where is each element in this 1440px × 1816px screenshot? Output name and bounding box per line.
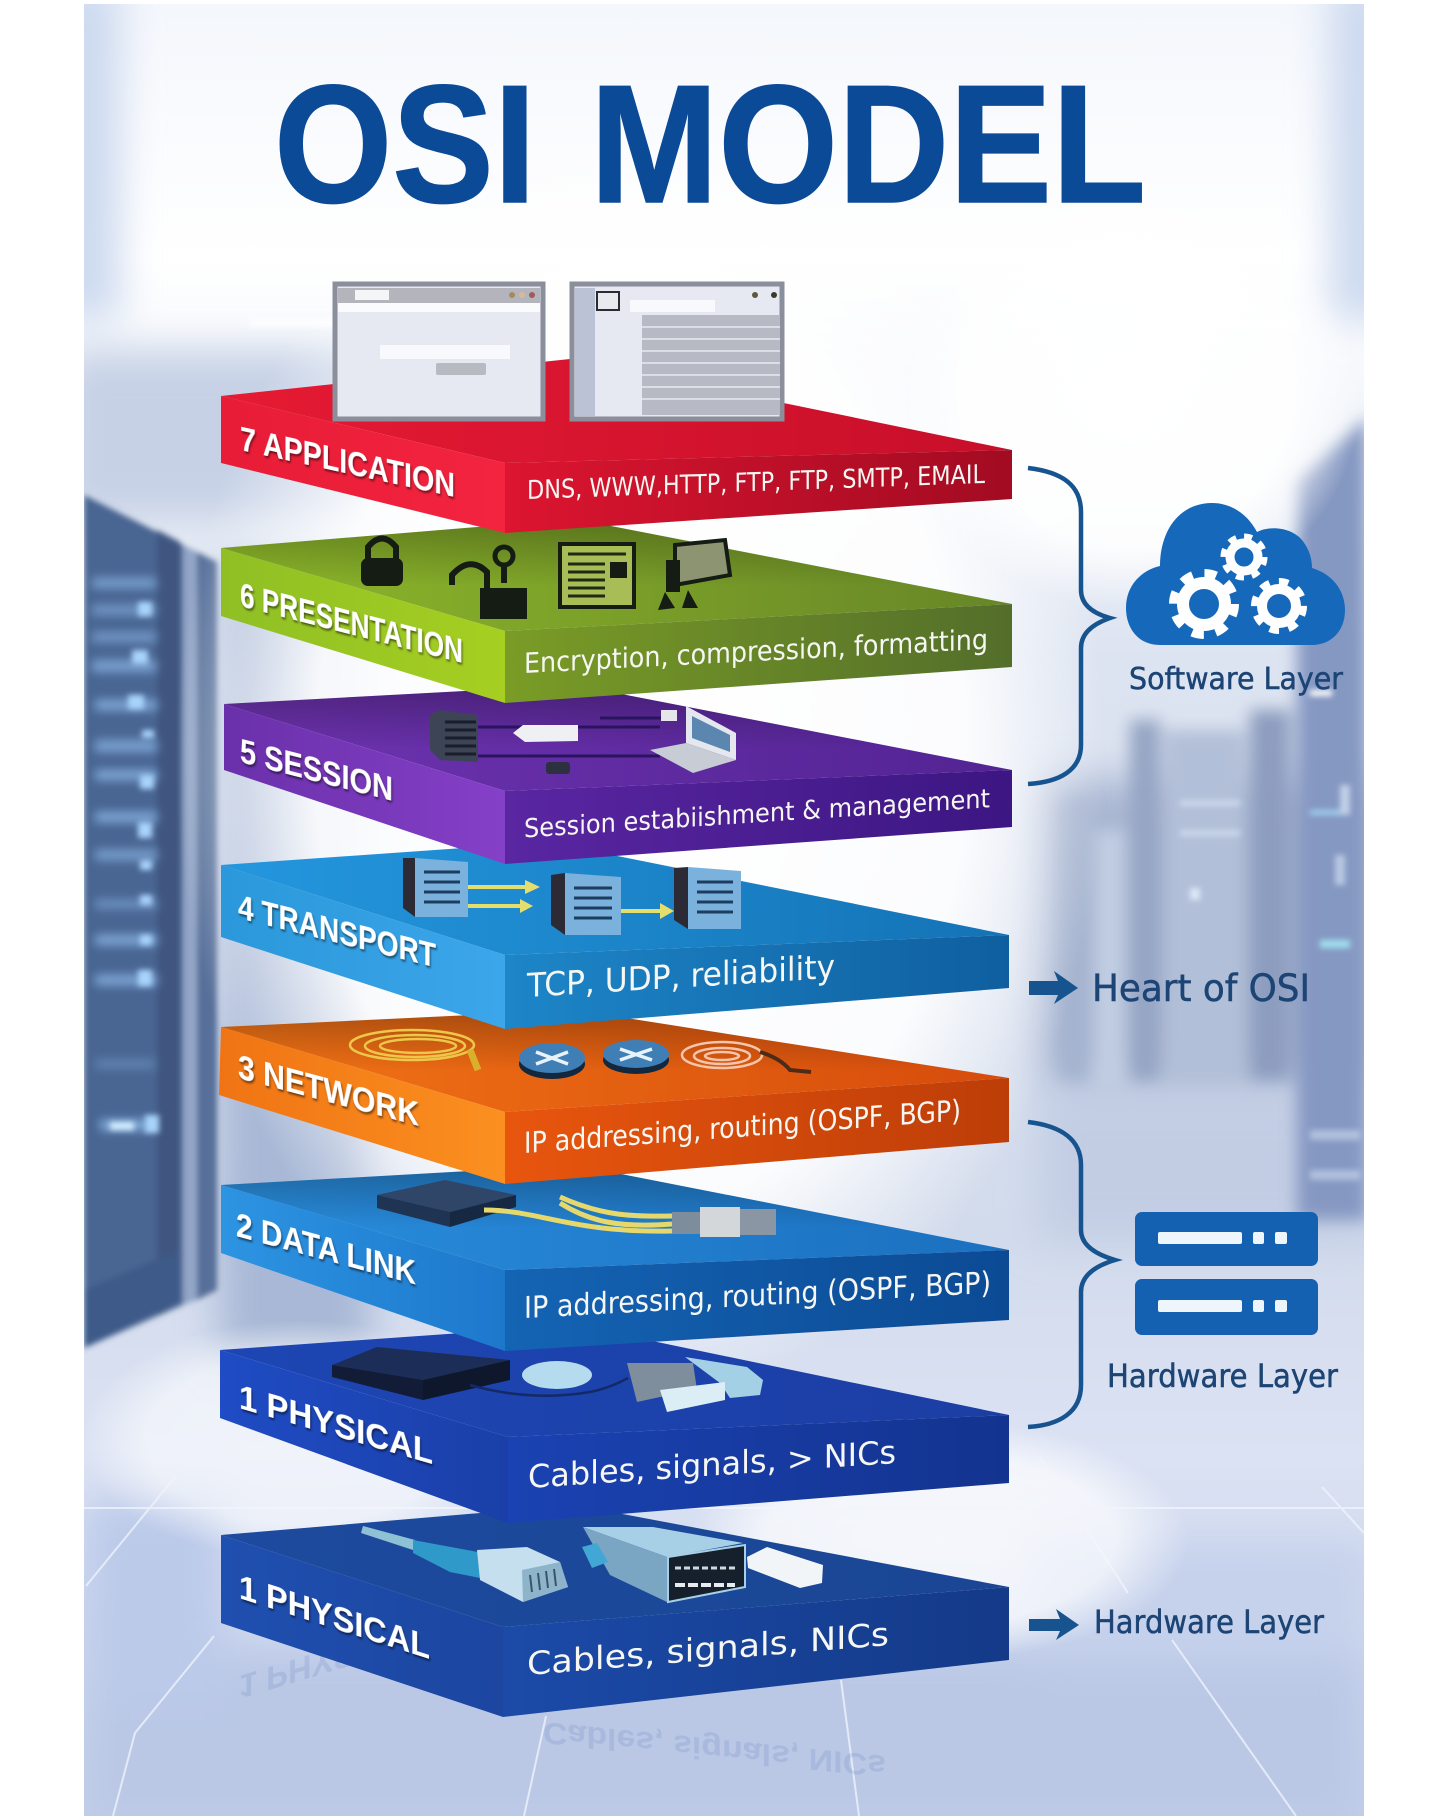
brace: software layers <box>1028 468 1110 784</box>
icon: browser window 1 <box>335 284 543 419</box>
layer 6: presentation <box>221 519 1012 703</box>
title: MODEL <box>590 50 1146 238</box>
icon: small module <box>661 710 677 721</box>
description: session management: Session estabiishment & management <box>524 784 990 844</box>
label: 1 physical: 1 PHYSICAL <box>239 1379 433 1472</box>
floor reflection text: Cables, signals, NICs <box>543 1715 886 1784</box>
label: 4 transport: 4 TRANSPORT <box>238 888 436 975</box>
icon: cable <box>470 1378 628 1396</box>
label: 1 physical: 1 PHYSICAL <box>239 1568 430 1667</box>
icon: document <box>560 544 634 607</box>
label: heart of OSI: Heart of OSI <box>1092 967 1310 1010</box>
icon: yellow cable coil <box>350 1030 478 1070</box>
floor reflection text: 1 PHYSICAL <box>239 1611 431 1705</box>
label: 3 network: 3 NETWORK <box>238 1049 419 1134</box>
icon: server 1 <box>403 858 468 917</box>
layer 2: data link <box>221 1165 1009 1351</box>
label: 2 data link: 2 DATA LINK <box>236 1207 416 1292</box>
label: 6 presentation: 6 PRESENTATION <box>240 576 463 671</box>
brace: hardware layers <box>1028 1122 1115 1427</box>
title <box>274 50 1146 238</box>
layer 1: physical (upper) <box>220 1325 1009 1523</box>
label: hardware layer: Hardware Layer <box>1107 1357 1339 1395</box>
left server racks <box>84 495 217 1348</box>
description: IP addressing: IP addressing, routing (OSPF, BGP) <box>524 1093 961 1160</box>
icon: yellow cables <box>484 1197 672 1231</box>
white haze around the stack <box>186 352 1088 1350</box>
floor reflection text <box>239 1611 886 1784</box>
description: cables: Cables, signals, NICs <box>527 1615 889 1683</box>
icon: pink cable coil <box>682 1042 811 1072</box>
icon: connector <box>627 1357 763 1412</box>
icon: small device <box>546 762 570 774</box>
icon: router 2 <box>603 1040 669 1074</box>
icon: router 1 <box>519 1043 585 1079</box>
layer 4: transport <box>221 842 1009 1029</box>
label: software layer: Software Layer <box>1129 662 1344 697</box>
icon: open lock with key <box>452 547 527 619</box>
description: protocols: DNS, WWW,HTTP, FTP, FTP, SMTP, EMAIL <box>527 460 985 506</box>
description: cables: Cables, signals, > NICs <box>528 1433 896 1496</box>
icon: connector plug <box>672 1207 776 1237</box>
icon: network interface card <box>582 1527 745 1602</box>
right server racks <box>1060 417 1367 1220</box>
icon: server tower <box>430 710 478 762</box>
icon: switch <box>377 1180 516 1227</box>
left rack lights <box>92 578 157 1130</box>
layer 3: network <box>219 1010 1009 1184</box>
description: encryption: Encryption, compression, formatting <box>524 623 988 680</box>
layer 5: session <box>224 685 1012 864</box>
icon: server rack <box>1135 1212 1318 1335</box>
label: 5 session: 5 SESSION <box>240 732 393 809</box>
arrow: hardware layer <box>1029 1609 1079 1640</box>
icon: browser window 2 <box>572 284 782 419</box>
icon: usb device <box>513 725 578 742</box>
icon: server 3 <box>674 867 741 929</box>
icon: ethernet connector <box>361 1526 568 1602</box>
description: TCP UDP: TCP, UDP, reliability <box>526 947 835 1005</box>
label: hardware layer physical: Hardware Layer <box>1094 1603 1325 1641</box>
icon: wires <box>478 718 665 756</box>
icon: white clip <box>747 1547 823 1588</box>
icon: closed lock <box>361 538 403 586</box>
icon: server 2 <box>551 873 621 935</box>
icon: yellow arrows <box>468 880 674 919</box>
description: IP addressing: IP addressing, routing (OSPF, BGP) <box>524 1266 991 1326</box>
layer 7: application <box>221 284 1012 533</box>
icon: printer figure <box>658 540 730 610</box>
label: 7 application: 7 APPLICATION <box>240 420 455 505</box>
icon: cloud with gears <box>1126 503 1345 645</box>
icon: switch box <box>332 1347 510 1400</box>
arrow: heart of OSI <box>1029 971 1078 1004</box>
floor tile lines <box>84 1457 1364 1816</box>
left rack bright spots <box>110 602 159 1133</box>
title: OSI <box>274 50 536 238</box>
icon: router disc <box>522 1361 592 1389</box>
right rack lights <box>1180 690 1360 1180</box>
layer 1: physical (bottom) <box>221 1505 1009 1717</box>
icon: laptop <box>650 706 736 773</box>
